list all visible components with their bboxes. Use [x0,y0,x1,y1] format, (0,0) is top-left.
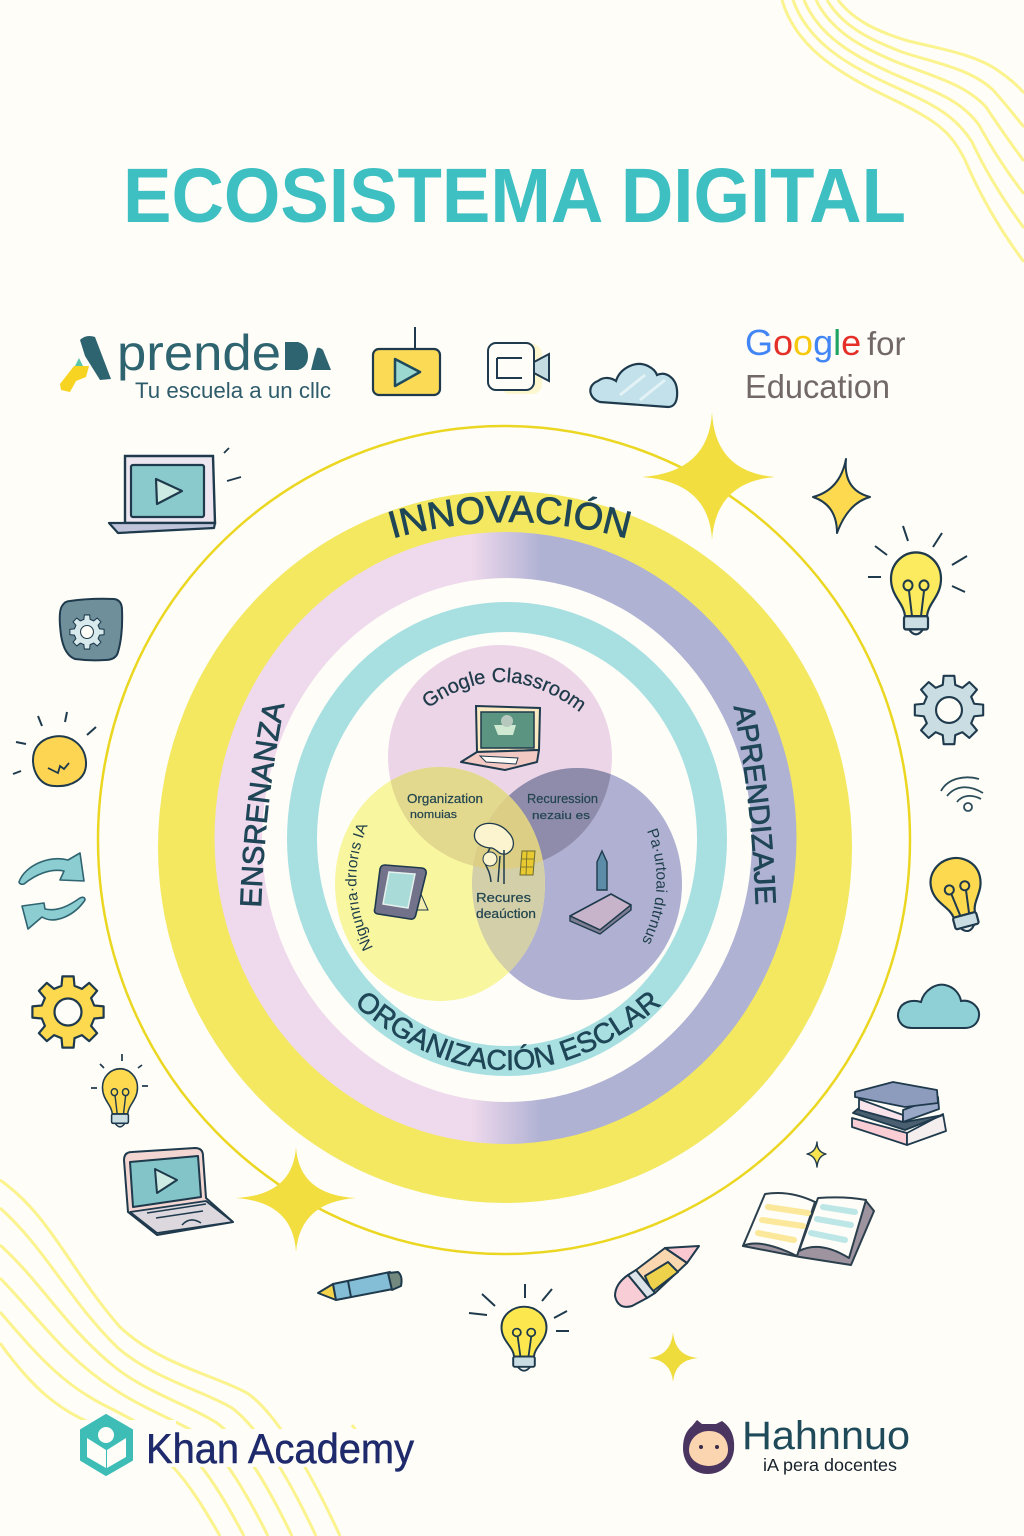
label: innovación: INNOVACIÓN [388,495,632,538]
logo: Khan Academy: Khan Academy [146,1425,414,1472]
logo: Google for Education [745,322,906,405]
icon: video play tile [373,327,440,395]
sparkle: bottom center [648,1332,698,1382]
outer thin circle [98,426,910,1254]
icon: tablet [374,865,428,919]
venn label: recuression: nezaiu es [532,810,591,822]
venn curved label: left: Nigunrıa·drıorıs IA [345,825,373,952]
sparkle: small star [807,1142,826,1167]
icon: refresh arrows [19,853,85,929]
logo: Hahnnuo: iA pera docentes [763,1455,897,1475]
icon: laptop bottom left [124,1148,233,1235]
venn label: recuression: Recuression [527,792,598,806]
logo: Khan Academy [81,1415,414,1475]
ring: enseñanza and aprendizaje (pink to lavender) [214,532,796,1144]
venn diagram [335,645,682,1001]
venn label: organization: nomuias [410,809,458,821]
icon: laptop in venn [461,706,540,770]
sparkle: outlined star [813,459,870,533]
logo: Hahnnuo: Hahnnuo [742,1414,910,1458]
logo: Aprende: prende [117,325,281,381]
icon: gear tile [60,599,122,660]
icon: gear grey [915,676,983,744]
venn label: organization [407,792,483,821]
ring: organización escolar (teal) [287,602,727,1076]
icon: gear yellow [32,976,104,1048]
venn label: recures deaúction: deaúction [476,907,536,921]
logo: Google for Education: Education [745,368,890,405]
icon: wifi [941,777,983,811]
sparkle: bottom left [236,1147,356,1252]
label: enseñanza: ENSRENANZA [240,704,285,906]
icon: tower and book [570,851,631,934]
label: aprendizaje: APRENDIZAJE [733,706,776,904]
venn label: organization: Organization [407,792,483,806]
icon: central figure [474,823,535,884]
venn curved label: right: Pa·urtoai dıtrnus [643,828,668,944]
icon: pencil blue [318,1272,402,1300]
icon: open book [743,1193,874,1265]
venn label: google classroom: Gnogle Classroom [423,668,584,712]
icon: bulb top right [868,526,967,634]
logo: Aprende [60,325,331,403]
icon: bulb bottom center [469,1284,569,1371]
icon: pencil right [615,1246,699,1307]
icon: video camera [488,343,549,394]
logo: Aprende: Tu escuela a un cllc [135,378,331,403]
icon: laptop top left [109,448,241,533]
logo: Hahnnuo [683,1414,910,1475]
sparkle: top right [642,412,775,540]
icon: bulb small left [91,1054,148,1127]
icon: cloud [590,364,677,407]
venn label: recures deaúction: Recures [476,891,531,905]
title: ECOSISTEMA DIGITAL [123,153,906,239]
icon: books [852,1082,946,1145]
icon: bulb right [925,852,993,937]
logo: Google for Education: for [867,325,906,362]
label: organización: ORGANIZACIÓN ESCLAR [358,992,662,1070]
icon: cloud teal [898,985,979,1028]
logo: Google for Education: Google [745,322,861,363]
venn label: recuression [527,792,598,822]
venn label: recures deaúction [476,891,536,921]
icon: sun face [13,712,96,786]
